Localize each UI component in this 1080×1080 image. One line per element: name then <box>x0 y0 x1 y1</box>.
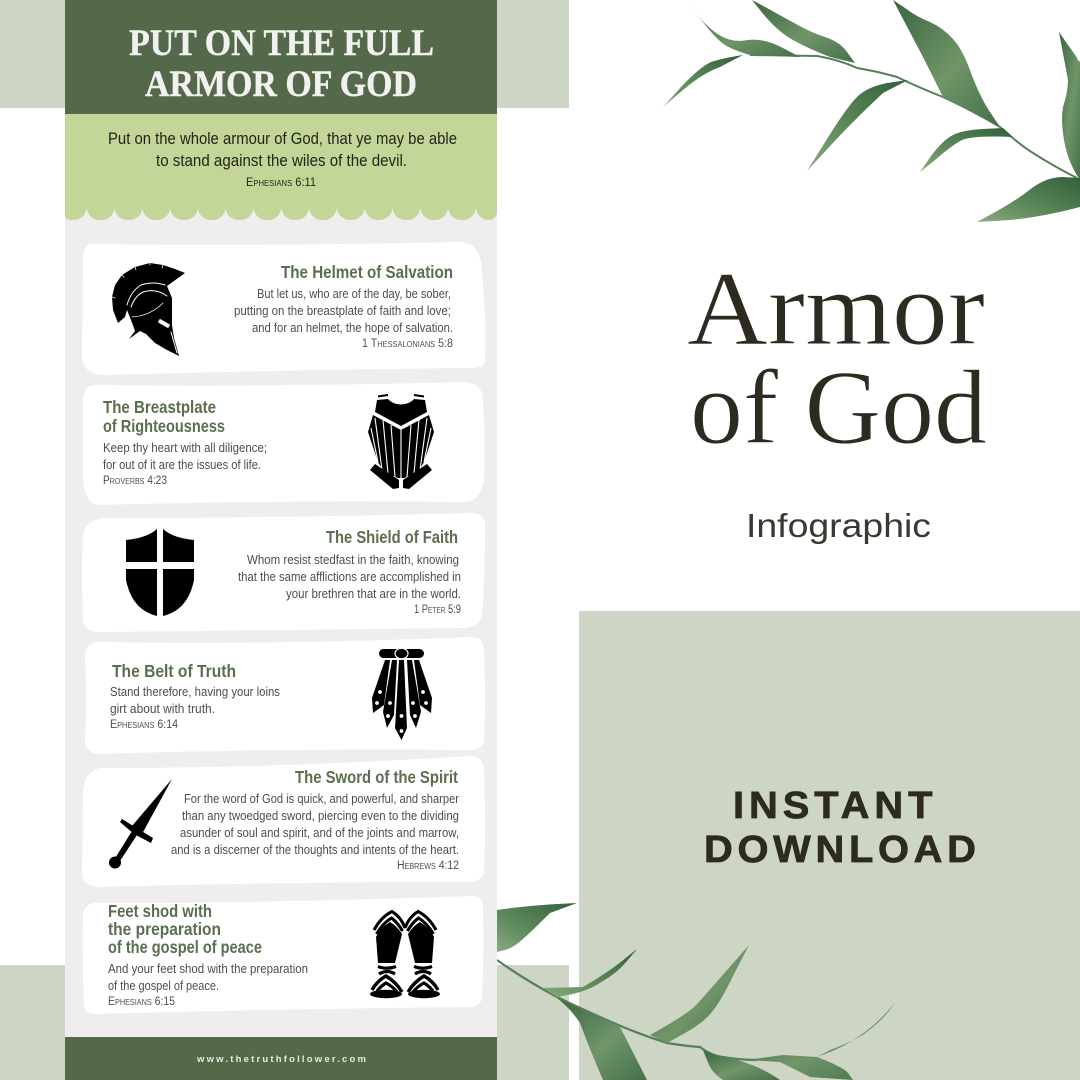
panel: feet shod <box>83 896 483 1014</box>
icon: breastplate <box>368 395 434 489</box>
heading: of the gospel of peace <box>108 937 262 957</box>
heading: The Helmet of Salvation <box>281 262 453 282</box>
verse <box>171 791 460 872</box>
icon: feet armor <box>370 912 440 998</box>
intro verse <box>108 129 457 189</box>
verse: your brethren that are in the world. <box>286 586 461 601</box>
background block: right <box>579 611 1080 1080</box>
verse: Keep thy heart with all diligence; <box>103 440 267 455</box>
footer band <box>65 1037 497 1080</box>
verse: that the same afflictions are accomplished in <box>238 569 461 584</box>
panel: belt of truth <box>85 637 485 754</box>
heading <box>108 901 262 957</box>
panel: breastplate of righteousness <box>83 382 485 505</box>
scalloped intro band <box>65 114 497 220</box>
heading: of Righteousness <box>103 416 225 436</box>
main title: Armor <box>687 250 985 367</box>
call to action: INSTANT <box>733 785 933 827</box>
heading: The Sword of the Spirit <box>295 767 458 787</box>
call to action: DOWNLOAD <box>704 829 976 871</box>
verse: girt about with truth. <box>110 701 215 716</box>
footer url: www.thetruthfollower.com <box>196 1054 366 1065</box>
verse <box>110 684 280 731</box>
verse: putting on the breastplate of faith and love; <box>234 303 451 318</box>
background band: bottom <box>0 965 569 1080</box>
background band: top <box>0 0 569 108</box>
heading: The Breastplate <box>103 397 216 417</box>
verse: Proverbs 4:23 <box>103 475 167 487</box>
verse: For the word of God is quick, and powerful, and sharper <box>184 791 460 806</box>
verse: of the gospel of peace. <box>108 978 219 993</box>
panel: helmet of salvation <box>82 242 486 375</box>
verse <box>108 961 308 1008</box>
panel: shield of faith <box>82 513 485 632</box>
heading: The Belt of Truth <box>112 661 236 681</box>
verse: 1 Peter 5:9 <box>414 604 461 616</box>
title <box>129 23 434 105</box>
icon: helmet <box>112 263 185 356</box>
verse: for out of it are the issues of life. <box>103 457 261 472</box>
verse: Whom resist stedfast in the faith, knowing <box>247 552 459 567</box>
verse: asunder of soul and spirit, and of the joints and marrow, <box>180 825 459 840</box>
verse: and for an helmet, the hope of salvation. <box>252 320 453 335</box>
verse <box>103 440 267 487</box>
heading: Feet shod with <box>108 901 212 921</box>
verse: 1 Thessalonians 5:8 <box>362 338 453 350</box>
heading: the preparation <box>108 919 221 939</box>
leaf branch: top right <box>663 0 1080 222</box>
subtitle: Infographic <box>746 507 931 544</box>
heading: The Shield of Faith <box>326 527 458 547</box>
intro verse: Ephesians 6:11 <box>246 177 316 189</box>
verse: than any twoedged sword, piercing even to the dividing <box>182 808 459 823</box>
title: PUT ON THE FULL <box>129 23 434 64</box>
icon: shield <box>126 529 194 616</box>
intro verse: Put on the whole armour of God, that ye may be able <box>108 129 457 148</box>
panel: sword of the spirit <box>82 756 485 887</box>
verse: And your feet shod with the preparation <box>108 961 308 976</box>
header band <box>65 0 497 114</box>
verse: and is a discerner of the thoughts and intents of the heart. <box>171 842 459 857</box>
call to action <box>704 785 976 871</box>
title: ARMOR OF GOD <box>145 64 417 105</box>
infographic panel <box>65 0 497 1080</box>
verse: But let us, who are of the day, be sober, <box>257 286 451 301</box>
main title: of God <box>690 349 987 466</box>
panel background <box>65 114 497 1044</box>
verse: Hebrews 4:12 <box>397 860 459 872</box>
main title <box>687 250 987 466</box>
verse <box>238 552 461 616</box>
verse: Ephesians 6:15 <box>108 996 175 1008</box>
heading <box>103 397 225 436</box>
leaf branch: bottom <box>497 903 895 1080</box>
verse <box>234 286 453 350</box>
verse: Stand therefore, having your loins <box>110 684 280 699</box>
icon: sword <box>109 779 172 868</box>
verse: Ephesians 6:14 <box>110 719 179 731</box>
icon: belt <box>372 648 432 740</box>
intro verse: to stand against the wiles of the devil. <box>156 151 407 170</box>
